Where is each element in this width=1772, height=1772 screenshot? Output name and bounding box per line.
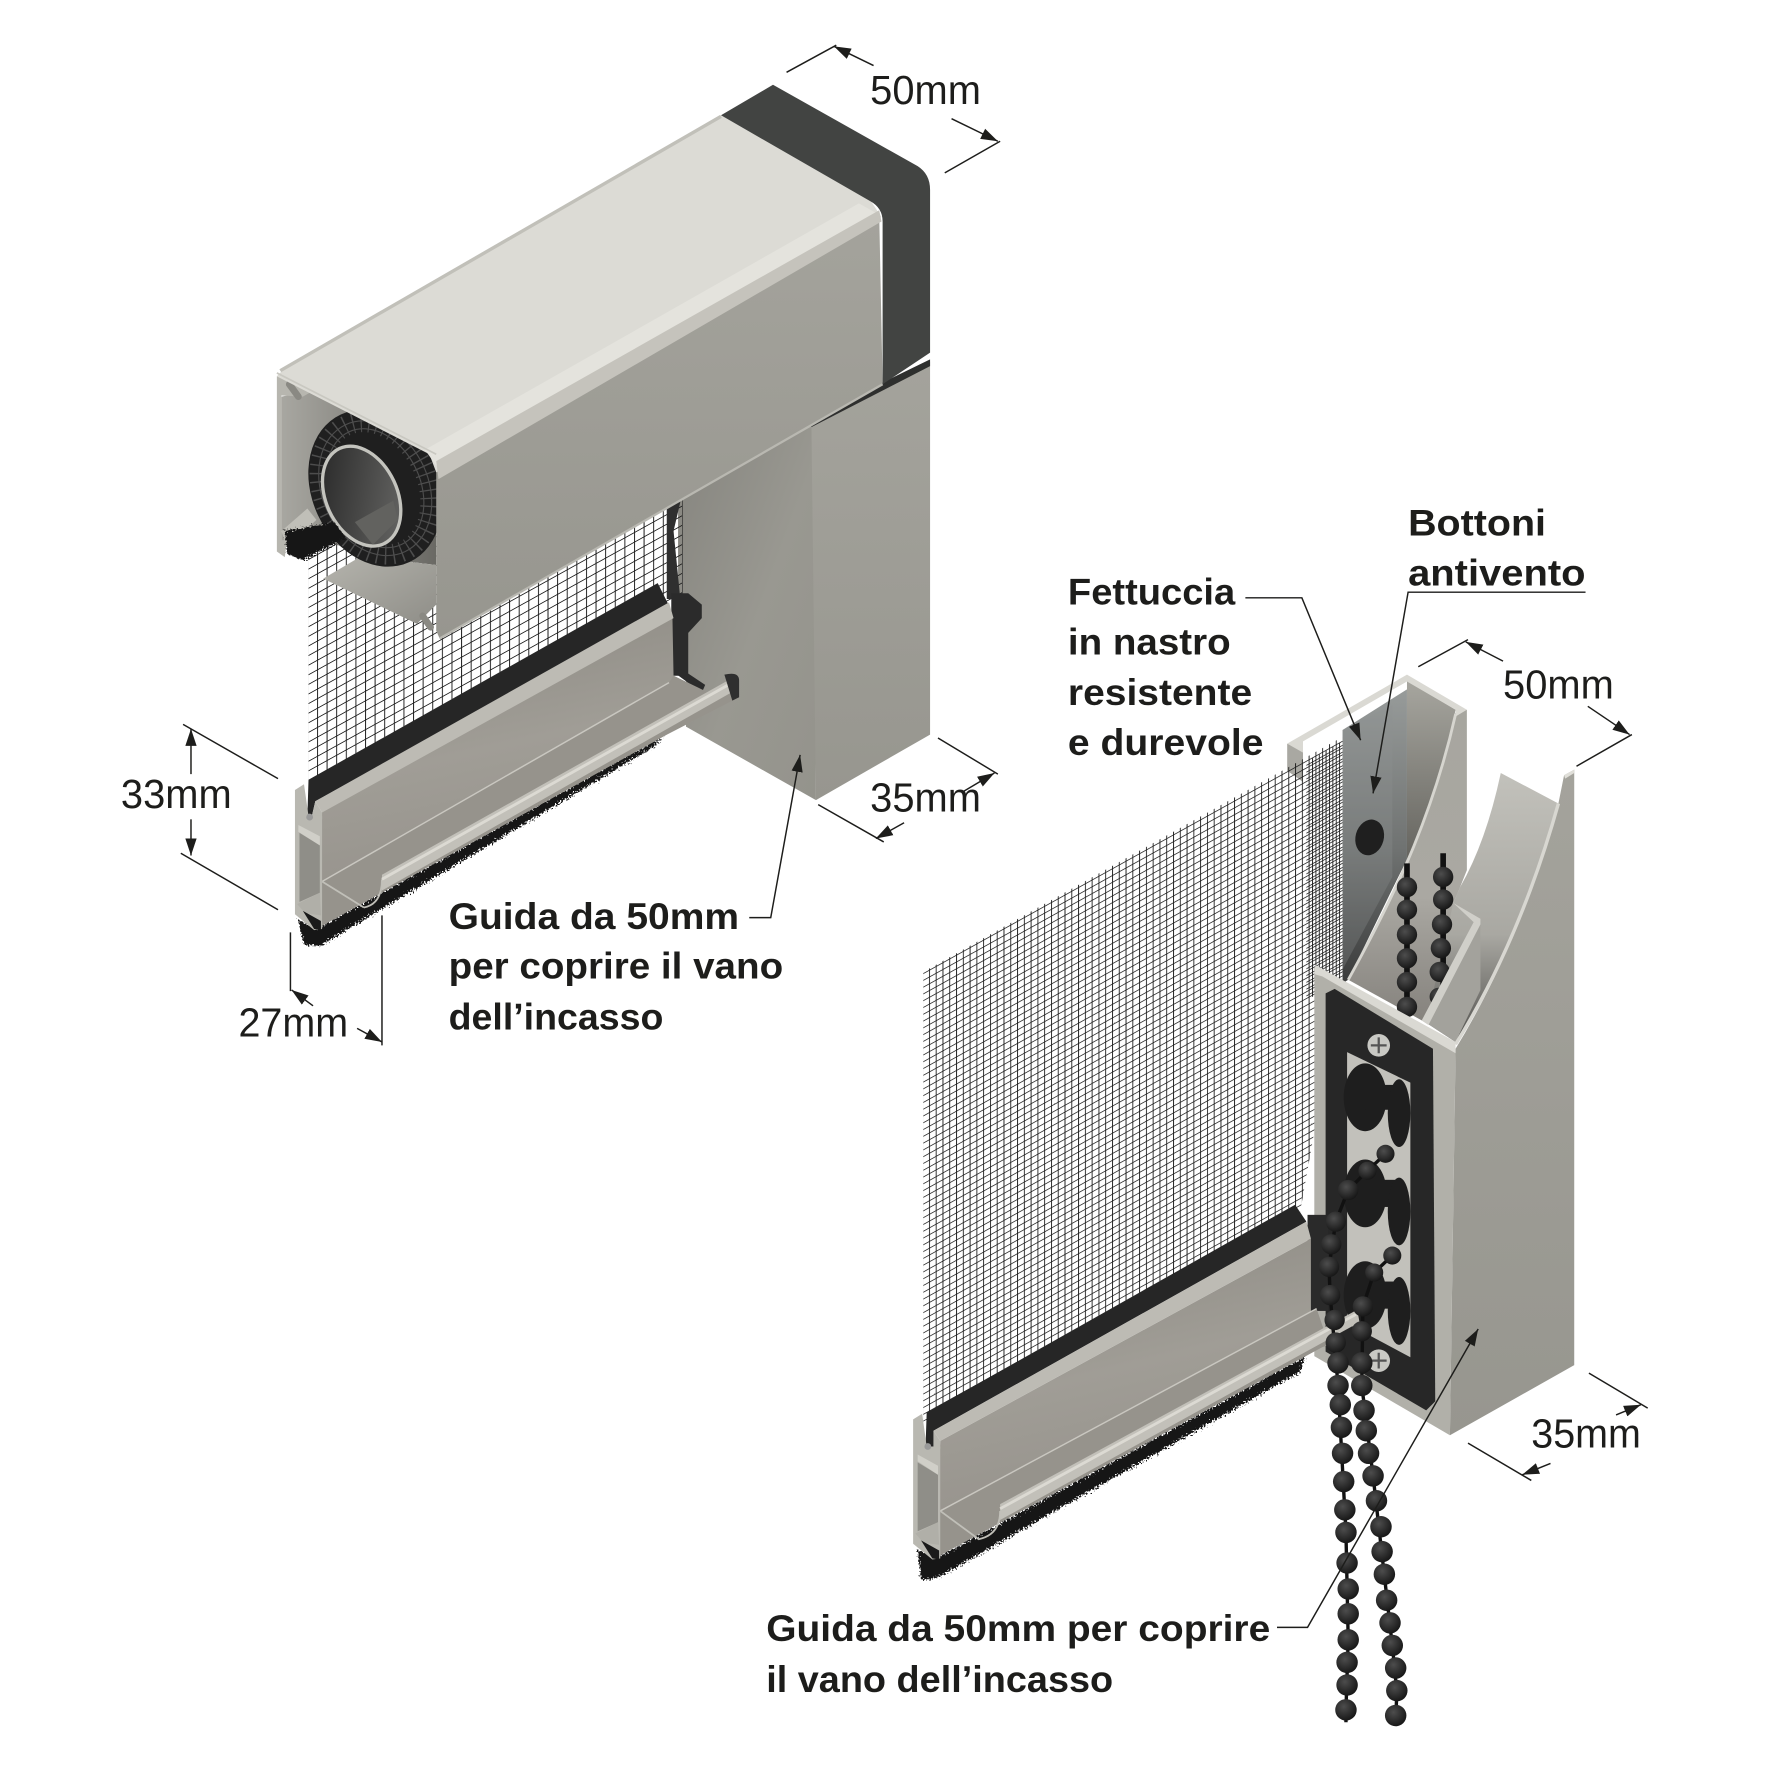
dimension: 50mm top: 50mm <box>870 67 981 113</box>
callout: fettuccia: resistente <box>1068 671 1252 713</box>
keyhole slots <box>289 384 431 627</box>
dimension: 50mm top <box>787 45 1000 173</box>
callout: guida bottom: Guida da 50mm per coprire <box>766 1607 1270 1649</box>
callout: bottoni antivento: antivento <box>1408 551 1586 593</box>
rear channel <box>1287 675 1474 1022</box>
callout: bottoni antivento <box>1373 502 1586 793</box>
roller with rolled mesh <box>283 388 467 589</box>
screw top <box>1367 1034 1390 1057</box>
rail end profile <box>913 1414 940 1560</box>
dimension: 33mm: 33mm <box>121 771 232 817</box>
open end with frame <box>277 370 436 627</box>
screw bottom <box>1367 1349 1390 1372</box>
dimension: 27mm <box>238 915 382 1045</box>
callout: fettuccia: in nastro <box>1068 620 1231 662</box>
brush <box>298 735 664 946</box>
callout: guida bottom <box>766 1329 1478 1700</box>
side guide: 50mm rear guide <box>678 359 930 800</box>
callout: guida top: dell’incasso <box>449 996 663 1038</box>
chains inside channel <box>1397 853 1453 1017</box>
callout: bottoni antivento: Bottoni <box>1408 502 1546 544</box>
callout: guida top: per coprire il vano <box>449 945 783 987</box>
dimension: 35mm top <box>818 738 998 842</box>
roller 3 <box>1344 1261 1410 1345</box>
callout: fettuccia <box>1068 571 1361 763</box>
black bracket with rollers <box>1326 989 1435 1410</box>
roller 1 <box>1344 1063 1410 1147</box>
dimension: 27mm: 27mm <box>238 999 348 1045</box>
bottom rail <box>913 1205 1360 1580</box>
callout: guida bottom: il vano dell’incasso <box>766 1658 1113 1700</box>
dimension: 50mm right: 50mm <box>1503 661 1614 707</box>
dimension: 33mm <box>121 724 278 910</box>
outer bead chains <box>1319 1145 1408 1726</box>
brush <box>918 1356 1305 1580</box>
roller 2 <box>1344 1159 1410 1245</box>
rail end profile <box>295 784 322 930</box>
bottom rail <box>295 583 739 946</box>
top assembly: cassette with side guide and rail <box>277 85 930 946</box>
dimension: 50mm right <box>1418 640 1632 766</box>
dimension: 35mm top: 35mm <box>870 774 981 820</box>
bottom assembly: side guide with chain and rail <box>913 675 1574 1726</box>
front guide <box>1314 770 1574 1435</box>
pull brush <box>285 522 346 561</box>
callout: guida top: Guida da 50mm <box>449 895 739 937</box>
mesh panel <box>923 737 1346 1422</box>
cassette box <box>277 115 883 639</box>
callout: guida top <box>449 755 800 1038</box>
tape and wind button <box>1343 705 1392 970</box>
dimension: 35mm right <box>1468 1373 1648 1480</box>
callout: fettuccia: e durevole <box>1068 721 1263 763</box>
black end cap <box>721 85 930 384</box>
rail bracket <box>671 593 705 693</box>
dimension: 35mm right: 35mm <box>1531 1411 1641 1457</box>
callout: fettuccia: Fettuccia <box>1068 571 1235 613</box>
insect mesh <box>309 497 683 797</box>
light wall behind mesh <box>1287 744 1303 782</box>
